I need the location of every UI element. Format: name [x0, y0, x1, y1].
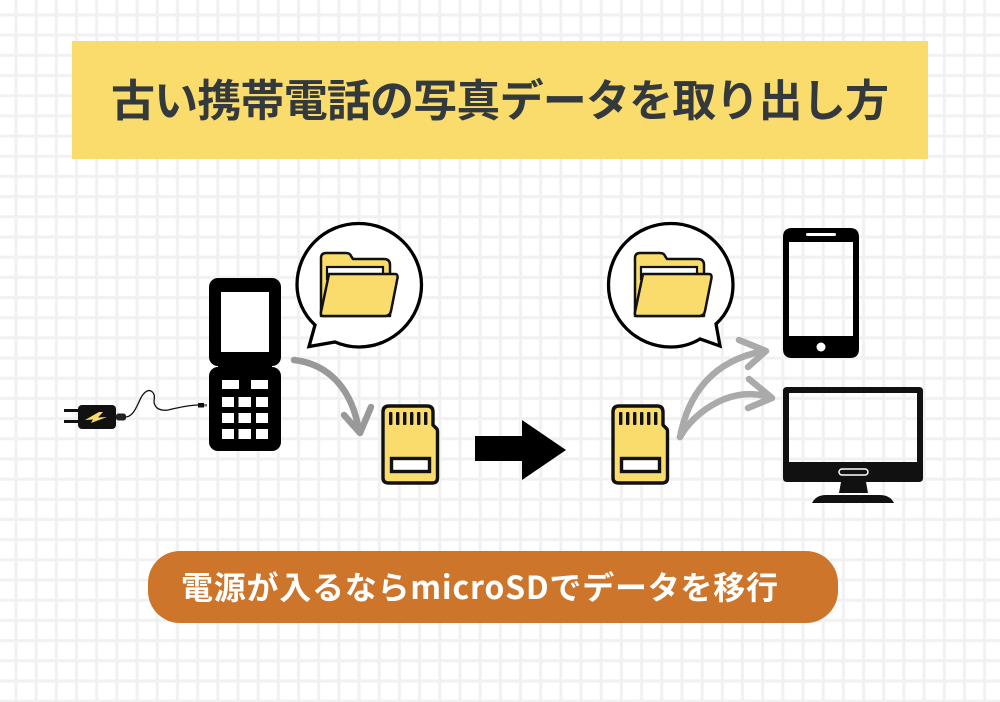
icon: microSD card (left): [383, 406, 438, 483]
icon: folder: [635, 253, 712, 316]
arrow: main right arrow: [475, 420, 566, 480]
arrows: card to devices: [680, 340, 772, 437]
icon: folder: [321, 253, 398, 316]
speech bubble with folder (left): [297, 224, 422, 347]
icon: smartphone: [783, 228, 859, 358]
title text: 古い携帯電話の写真データを取り出し方: [111, 65, 889, 129]
icon: flip phone: [209, 278, 281, 451]
icon: microSD card (right): [613, 406, 668, 483]
arrow: phone to card: [294, 360, 371, 433]
icon: charger and cable: [64, 391, 207, 429]
caption pill: [148, 551, 838, 623]
icon: desktop monitor: [783, 387, 923, 503]
speech bubble with folder (right): [608, 224, 733, 347]
title banner: [72, 41, 928, 159]
caption text: 電源が入るならmicroSDでデータを移行: [181, 563, 778, 609]
